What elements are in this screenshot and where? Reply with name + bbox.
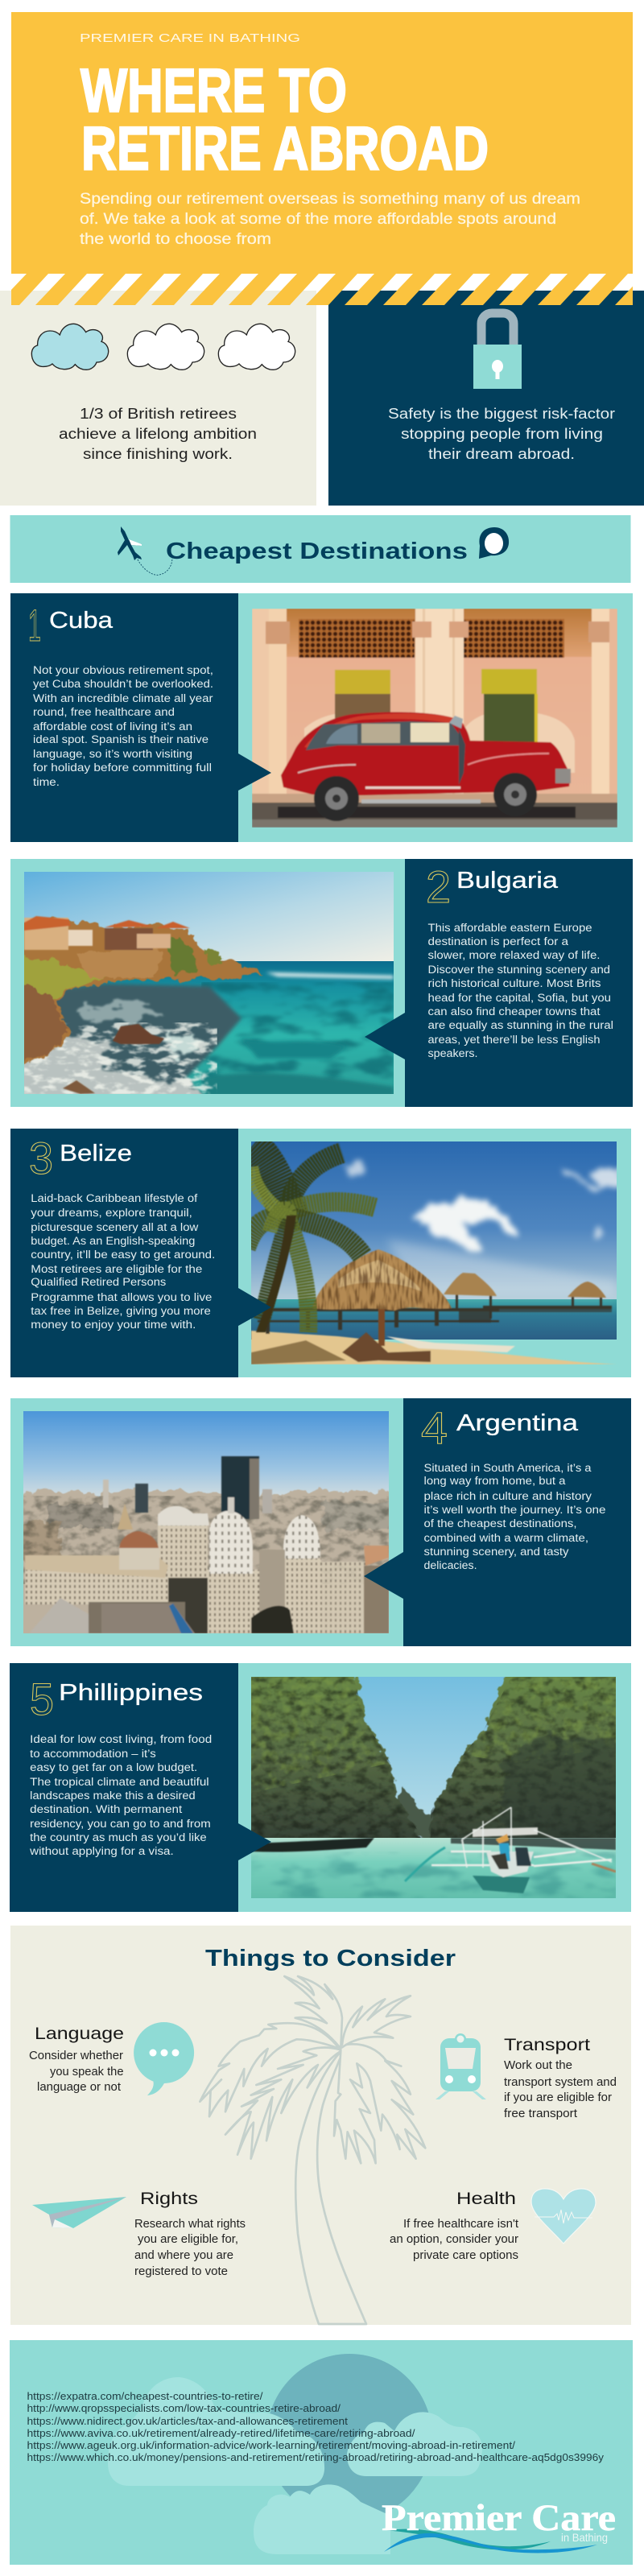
item: rights: registered to vote: [134, 2265, 228, 2278]
arrow pointer: [365, 1013, 405, 1059]
source links: http://www.qropsspecialists.com/low-tax-countries-retire-abroad/: [27, 2402, 341, 2414]
palm in photo: [246, 1147, 375, 1332]
item: language: Consider whether: [29, 2050, 123, 2062]
icon: train: [436, 2033, 486, 2099]
body text: of the cheapest destinations,: [423, 1517, 576, 1530]
body text: without applying for a visa.: [29, 1845, 174, 1857]
number 5: 5: [30, 1674, 54, 1724]
intro text: the world to choose from: [80, 230, 271, 248]
body text: time.: [33, 776, 60, 788]
body text: Programme that allows you to live: [31, 1291, 212, 1303]
intro text: of. We take a look at some of the more affordable spots around: [80, 210, 556, 228]
body text: are equally as stunning in the rural: [428, 1019, 613, 1031]
body text: [428, 922, 613, 1059]
banner: cheapest destinations: [10, 515, 631, 583]
panel: left stat background: [0, 291, 316, 506]
icon: heart with pulse: [531, 2189, 596, 2244]
item: transport: free transport: [504, 2107, 577, 2120]
stat text: 1/3 of British retirees: [80, 406, 237, 422]
decorative sun: [266, 2354, 432, 2521]
body text: country, it’ll be easy to get around.: [31, 1249, 215, 1261]
body text: language, so it’s worth visiting: [33, 748, 192, 760]
photo: coastal cliff and sea: [12, 872, 394, 1107]
body text: Not your obvious retirement spot,: [33, 664, 213, 676]
body text: Laid-back Caribbean lifestyle of: [31, 1192, 198, 1204]
arrow pointer: [364, 1552, 403, 1599]
title: RETIRE ABROAD: [81, 114, 489, 184]
body text: Ideal for low cost living, from food: [30, 1733, 212, 1745]
number 2: 2: [426, 861, 451, 912]
body text: With an incredible climate all year: [33, 692, 213, 704]
card 3: Belize: [10, 1129, 631, 1377]
item: health: Health: [456, 2190, 516, 2208]
stat text: their dream abroad.: [428, 446, 575, 462]
body text: destination. With permanent: [30, 1803, 182, 1815]
body text: [31, 1192, 215, 1331]
panel: things to consider: [10, 1926, 631, 2325]
arrow pointer: [238, 1288, 271, 1326]
item: rights: [32, 2190, 246, 2278]
body text: landscapes make this a desired: [30, 1790, 196, 1802]
logo: Premier Care in Bathing: in Bathing: [561, 2531, 608, 2544]
stat text: Safety is the biggest risk-factor: [388, 406, 615, 422]
body text: affordable cost of living it’s an: [33, 720, 192, 733]
heading: Cheapest Destinations: [166, 539, 468, 564]
body text: slower, more relaxed way of life.: [428, 949, 601, 961]
card 1: Cuba: [10, 593, 633, 842]
body text: [33, 664, 213, 788]
icon: plane with dashed route: [118, 526, 172, 575]
number 1: 1: [28, 600, 41, 650]
body text: The tropical climate and beautiful: [30, 1776, 209, 1788]
item: health: an option, consider your: [390, 2233, 518, 2246]
decorative clouds: [108, 2377, 482, 2554]
eyebrow text: PREMIER CARE IN BATHING: [80, 31, 300, 45]
body text: [29, 1733, 212, 1857]
stat text: stopping people from living: [401, 426, 603, 442]
body text: destination is perfect for a: [428, 935, 569, 947]
item: health: If free healthcare isn't: [403, 2218, 518, 2231]
item: language: you speak the: [50, 2066, 124, 2079]
item: language: Language: [35, 2025, 124, 2043]
body text: stunning scenery, and tasty: [423, 1546, 569, 1558]
icon: three clouds: [31, 324, 295, 369]
card 2: Bulgaria: [10, 859, 633, 1107]
logo: Premier Care in Bathing: Premier Care: [382, 2497, 616, 2539]
title: [80, 56, 489, 184]
body text: picturesque scenery all at a low: [31, 1221, 199, 1233]
body text: residency, you can go to and from: [30, 1818, 211, 1830]
card 4: Argentina: [10, 1398, 631, 1646]
stat: one third of retirees: [31, 324, 295, 462]
item: transport: [436, 2033, 617, 2120]
footer panel: [10, 2340, 633, 2565]
card 5: Phillippines: [10, 1662, 632, 1912]
item: language: language or not: [37, 2081, 121, 2094]
body text: speakers.: [428, 1047, 478, 1059]
intro text: [80, 190, 580, 248]
item: transport: if you are eligible for: [504, 2091, 612, 2104]
body text: to accommodation – it’s: [30, 1748, 156, 1760]
item: health: [390, 2189, 596, 2262]
body text: Most retirees are eligible for the: [31, 1263, 202, 1275]
heading: Cuba: Cuba: [49, 608, 114, 634]
source links: https://www.which.co.uk/money/pensions-and-retirement/retiring-abroad/retiring-abroad-and-healthcare-aq5dg0s3996y: [27, 2451, 605, 2463]
source links: https://expatra.com/cheapest-countries-to-retire/: [27, 2390, 263, 2402]
body text: for holiday before committing full: [33, 762, 212, 774]
stat text: achieve a lifelong ambition: [59, 426, 257, 442]
body text: money to enjoy your time with.: [31, 1319, 196, 1331]
item: health: private care options: [413, 2249, 518, 2262]
icon: speech bubble: [479, 527, 509, 559]
body text: ideal spot. Spanish is their native: [33, 733, 208, 745]
source links: https://www.ageuk.org.uk/information-advice/work-learning/retirement/moving-abroad-in-retirement/: [27, 2439, 515, 2451]
body text: head for the capital, Sofia, but you: [428, 992, 611, 1004]
photo: red classic car: [252, 609, 617, 828]
body text: Qualified Retired Persons: [31, 1276, 167, 1288]
arrow pointer: [238, 1823, 271, 1860]
number 4: 4: [421, 1402, 448, 1453]
body text: the country as much as you’d like: [30, 1831, 207, 1843]
header panel: [0, 12, 644, 305]
item: rights: Rights: [140, 2190, 198, 2208]
heading: Bulgaria: Bulgaria: [456, 868, 559, 894]
item: rights: you are eligible for,: [138, 2233, 238, 2246]
heading: Things to Consider: [205, 1946, 456, 1971]
body text: budget. As an English-speaking: [31, 1235, 195, 1247]
hazard stripes: [0, 274, 644, 305]
arrow pointer: [238, 753, 271, 791]
heading: Phillippines: Phillippines: [59, 1680, 203, 1706]
stat text: since finishing work.: [83, 446, 233, 462]
body text: This affordable eastern Europe: [428, 922, 592, 934]
source links: [27, 2390, 605, 2463]
body text: can also find cheaper towns that: [428, 1005, 601, 1018]
photo: beach huts and palm: [246, 1141, 624, 1364]
icon: padlock: [473, 313, 522, 389]
body text: tax free in Belize, giving you more: [31, 1305, 211, 1317]
stat: safety risk: [388, 313, 615, 462]
body text: delicacies.: [423, 1559, 477, 1571]
heading: Argentina: Argentina: [456, 1410, 579, 1436]
icon: paper plane: [32, 2197, 126, 2228]
number 3: 3: [29, 1133, 53, 1183]
body text: rich historical culture. Most Brits: [428, 977, 601, 989]
body text: [423, 1462, 605, 1571]
body text: round, free healthcare and: [33, 706, 175, 718]
item: rights: and where you are: [134, 2249, 233, 2262]
body text: long way from home, but a: [423, 1475, 566, 1487]
item: rights: Research what rights: [134, 2218, 246, 2231]
stat text: [59, 406, 257, 462]
photo: city skyline: [12, 1411, 398, 1642]
body text: Situated in South America, it’s a: [423, 1462, 592, 1474]
body text: Discover the stunning scenery and: [428, 964, 610, 976]
source links: https://www.aviva.co.uk/retirement/already-retired/lifetime-care/retiring-abroad/: [27, 2427, 415, 2439]
title: WHERE TO: [80, 56, 347, 126]
intro text: Spending our retirement overseas is something many of us dream: [80, 190, 580, 208]
item: transport: Transport: [504, 2036, 590, 2054]
body text: it’s well worth the journey. It’s one: [423, 1504, 605, 1516]
heading: Belize: Belize: [60, 1141, 132, 1166]
body text: combined with a warm climate,: [423, 1532, 588, 1544]
body text: easy to get far on a low budget.: [30, 1761, 197, 1773]
source links: https://www.nidirect.gov.uk/articles/tax-and-allowances-retirement: [27, 2415, 348, 2427]
body text: yet Cuba shouldn’t be overlooked.: [33, 678, 213, 690]
body text: place rich in culture and history: [423, 1490, 592, 1502]
body text: your dreams, explore tranquil,: [31, 1207, 192, 1219]
body text: areas, yet there’ll be less English: [428, 1034, 601, 1046]
illustration: palm tree outline: [200, 1976, 425, 2324]
item: language: [29, 2022, 194, 2095]
icon: speech bubble: [134, 2022, 194, 2095]
stat text: [388, 406, 615, 462]
item: transport: transport system and: [504, 2076, 617, 2089]
panel: right stat background: [328, 291, 644, 506]
photo: limestone cliffs and boat: [251, 1677, 616, 1898]
item: transport: Work out the: [504, 2059, 572, 2072]
